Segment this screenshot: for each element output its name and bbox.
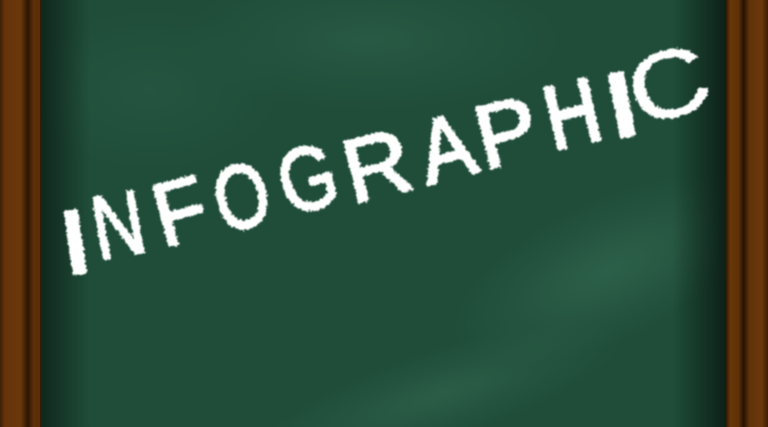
chalk title: A	[407, 93, 485, 204]
chalk title: F	[142, 156, 218, 267]
chalk title: I	[598, 53, 646, 158]
left wooden frame	[0, 0, 41, 427]
chalk title: R	[332, 109, 422, 223]
chalk title: H	[535, 58, 610, 169]
chalk title: O	[204, 142, 280, 253]
chalk title: N	[84, 172, 153, 280]
right wooden frame	[726, 0, 768, 427]
chalk title: I	[56, 191, 95, 292]
chalk title: G	[267, 124, 349, 235]
chalk title: P	[464, 77, 549, 189]
chalk title: C	[614, 22, 724, 148]
chalk title	[56, 22, 724, 292]
